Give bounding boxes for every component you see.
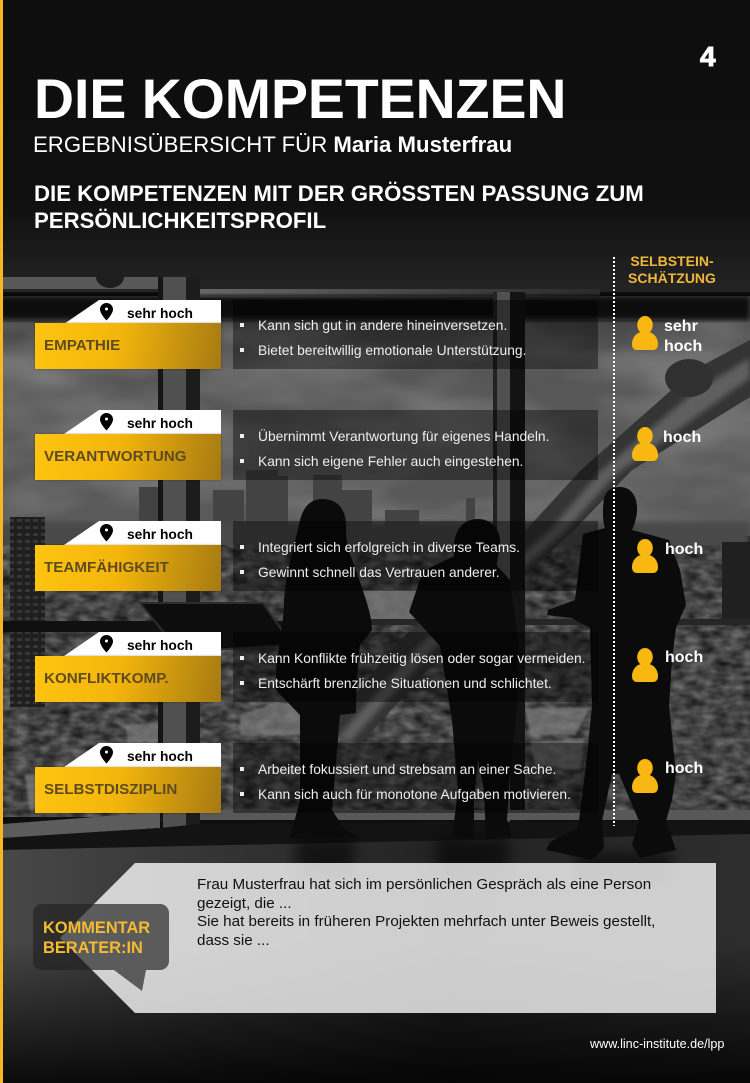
dotted column divider — [613, 257, 615, 826]
window sill — [3, 812, 160, 838]
bubble label: KOMMENTAR — [43, 919, 150, 937]
row 2: Verantwortung — [34, 410, 598, 481]
statement 1: Integriert sich erfolgreich in diverse Teams. — [258, 540, 520, 555]
competency label: TEAMFÄHIGKEIT — [44, 559, 169, 576]
section heading: DIE KOMPETENZEN MIT DER GRÖSSTEN PASSUNG ZUM — [34, 181, 644, 206]
row 4: Konfliktkompetenz — [35, 632, 592, 703]
competency label: SELBSTDISZIPLIN — [44, 781, 177, 798]
silhouette: man in middle — [409, 519, 518, 838]
rating label: sehr hoch — [127, 527, 193, 542]
section heading — [34, 181, 644, 233]
self-assessment column heading: SCHÄTZUNG — [628, 270, 716, 286]
statement 2: Gewinnt schnell das Vertrauen anderer. — [258, 565, 500, 580]
comment panel — [60, 863, 716, 1013]
floor reflections of people — [296, 838, 672, 882]
comment text: Frau Musterfrau hat sich im persönlichen Gespräch als eine Person — [197, 876, 651, 893]
rail — [0, 621, 300, 632]
footer url: www.linc-institute.de/lpp — [590, 1037, 724, 1051]
rating tab — [64, 632, 221, 656]
icon: person row 3 — [632, 539, 658, 573]
icon: person row 5 — [632, 759, 658, 793]
rating label: sehr hoch — [127, 416, 193, 431]
competency label: EMPATHIE — [44, 337, 120, 354]
self-assessment value row 3: hoch — [665, 541, 703, 558]
icon: person row 4 — [632, 648, 658, 682]
self-assessment value row 1: hoch — [664, 338, 702, 355]
self-assessment column heading — [628, 253, 716, 286]
bubble label: BERATER:IN — [43, 939, 143, 957]
self-assessment value row 1: sehr — [664, 318, 698, 335]
competency label — [35, 656, 221, 702]
comment text — [197, 876, 655, 949]
icon: person row 2 — [632, 427, 658, 461]
bubble label — [43, 919, 150, 957]
page number: 4 — [700, 41, 716, 72]
statement 1: Kann sich gut in andere hineinversetzen. — [258, 318, 507, 333]
rating label: sehr hoch — [127, 749, 193, 764]
section heading: PERSÖNLICHKEITSPROFIL — [34, 208, 326, 233]
statement 2: Entschärft brenzliche Situationen und schlichtet. — [258, 676, 552, 691]
description panel — [233, 632, 598, 702]
statement 2: Kann sich auch für monotone Aufgaben motivieren. — [258, 787, 571, 802]
comment text: dass sie ... — [197, 932, 270, 949]
self-assessment column heading: SELBSTEIN- — [630, 253, 714, 269]
kiosk stand — [140, 603, 292, 652]
rating tab — [64, 743, 221, 767]
row 5: Selbstdisziplin — [34, 743, 588, 814]
skyline — [139, 470, 475, 550]
competency label — [35, 545, 221, 591]
diagonal steel beam — [325, 340, 750, 745]
description panel — [233, 521, 598, 591]
comment text: gezeigt, die ... — [197, 895, 292, 912]
statement 2: Bietet bereitwillig emotionale Unterstützung. — [258, 343, 526, 358]
window strip below ceiling — [3, 277, 159, 289]
competency label — [35, 767, 221, 813]
competency label: VERANTWORTUNG — [44, 448, 187, 465]
comment text: Sie hat bereits in früheren Projekten mehrfach unter Beweis gestellt, — [197, 913, 655, 930]
competency label — [35, 434, 221, 480]
description panel — [233, 300, 598, 369]
statement 2: Kann sich eigene Fehler auch eingestehen. — [258, 454, 523, 469]
rating tab — [64, 521, 221, 545]
subtitle: ERGEBNISÜBERSICHT FÜR Maria Musterfrau — [33, 132, 512, 157]
statement 1: Kann Konflikte frühzeitig lösen oder sogar vermeiden. — [258, 651, 585, 666]
rating label: sehr hoch — [127, 638, 193, 653]
rating tab — [64, 410, 221, 434]
floor — [0, 834, 750, 1083]
self-assessment value row 2: hoch — [663, 429, 701, 446]
icon: person row 1 — [632, 316, 658, 350]
competency label — [35, 323, 221, 369]
silhouette: woman — [276, 499, 372, 838]
self-assessment value row 5: hoch — [665, 760, 703, 777]
title: DIE KOMPETENZEN — [34, 68, 566, 130]
left accent stripe — [0, 0, 3, 1083]
security camera — [96, 266, 124, 288]
silhouette: man on right — [546, 487, 686, 860]
speech bubble — [33, 904, 169, 991]
city texture — [0, 545, 750, 817]
competency label: KONFLIKTKOMP. — [44, 670, 169, 687]
window columns — [158, 277, 525, 837]
statement 1: Arbeitet fokussiert und strebsam an einer Sache. — [258, 762, 556, 777]
rating tab — [66, 300, 221, 323]
self-assessment value row 4: hoch — [665, 649, 703, 666]
row 1: Empathie — [34, 300, 598, 370]
self-assessment value row 1 — [664, 318, 702, 355]
statement 1: Übernimmt Verantwortung für eigenes Handeln. — [258, 429, 549, 444]
rating label: sehr hoch — [127, 306, 193, 321]
description panel — [233, 410, 598, 480]
row 3: Teamfähigkeit — [35, 521, 598, 592]
description panel — [233, 743, 598, 813]
